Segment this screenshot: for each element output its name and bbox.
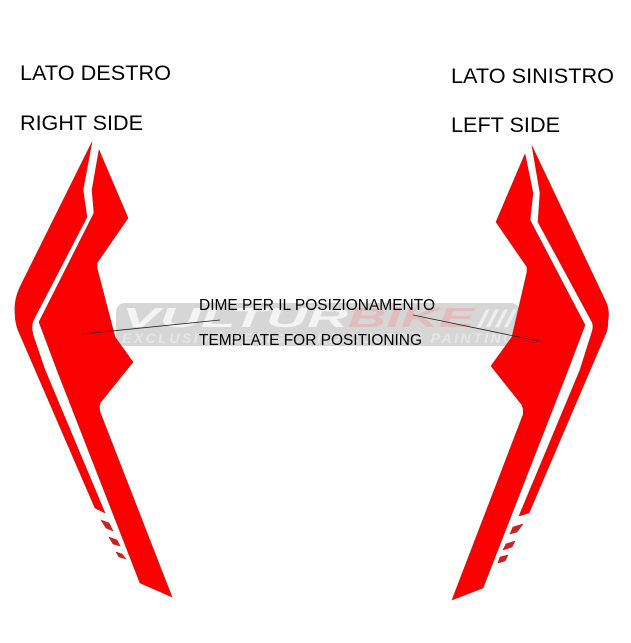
watermark banner [116,302,520,346]
left side decal template [452,146,609,600]
right side decal template [15,142,172,597]
watermark banner: BIKE [348,302,476,333]
label: template: TEMPLATE FOR POSITIONING [199,332,422,349]
main body [39,150,172,597]
leader line: left [82,320,220,334]
heading: right side: RIGHT SIDE [20,112,143,135]
watermark banner: VULTUR [122,302,350,333]
outer stripe [15,142,105,513]
watermark banner: //// [477,306,517,333]
main body [452,154,585,600]
stripe dashes [498,524,523,563]
label: dime: DIME PER IL POSIZIONAMENTO [199,297,435,314]
heading: left side: LEFT SIDE [451,114,560,137]
watermark banner: EXCLUSIVE DESIGN AND CUSTOM PAINTING [122,330,514,346]
stripe dashes [101,520,126,559]
leader line: right [413,315,543,342]
heading: lato sinistro: LATO SINISTRO [451,65,614,88]
outer stripe [519,146,609,516]
heading: lato destro: LATO DESTRO [20,62,171,85]
